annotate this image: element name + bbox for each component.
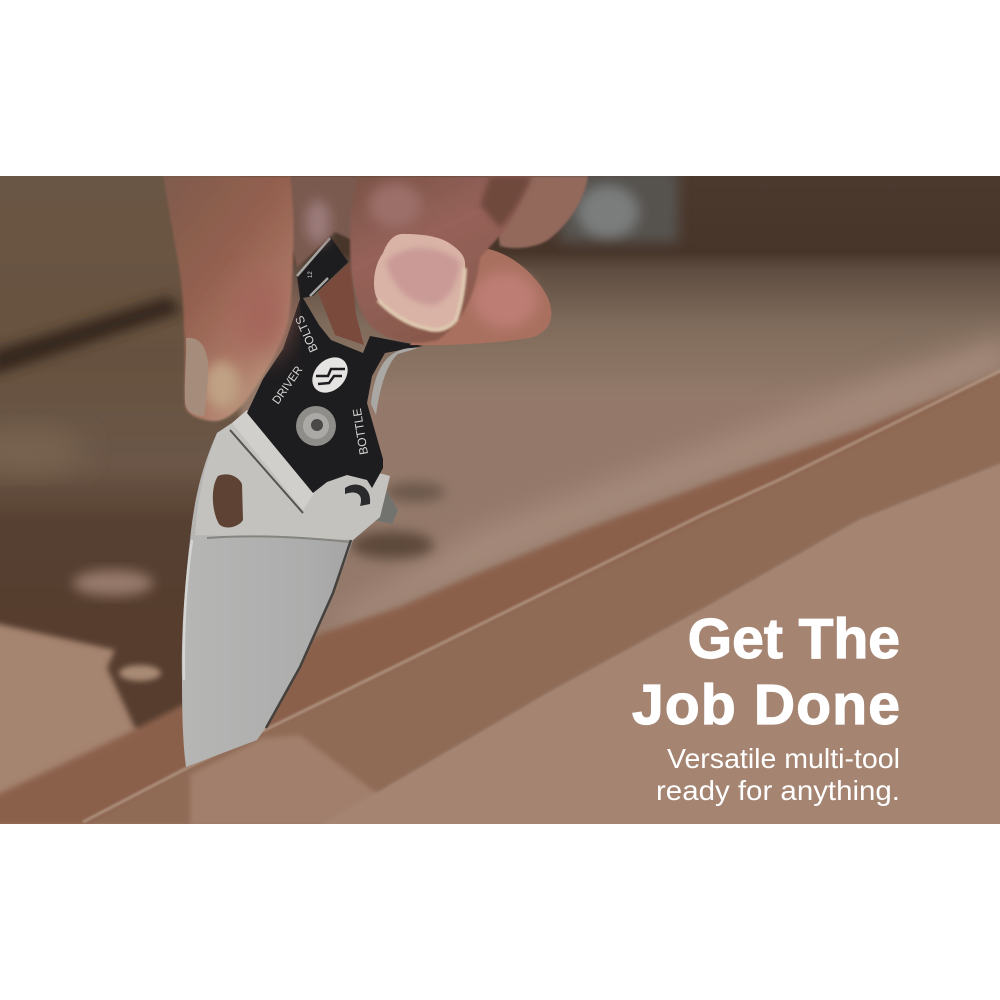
icon: black multi-tool handle: 12 [308, 271, 314, 278]
bar highlights [297, 238, 330, 276]
heading and caption: Job Done [632, 673, 900, 737]
tool logo [312, 357, 348, 393]
caption: Versatile multi-tool [667, 743, 900, 774]
web of skin behind tool [288, 176, 360, 268]
steel frame under the handle [232, 410, 315, 510]
lower-left cardboard [0, 624, 134, 793]
packing tape strip [0, 368, 1000, 826]
back fingers [490, 176, 588, 248]
lower cardboard flap [320, 460, 1000, 826]
thumb [350, 176, 530, 343]
shadowed wall and knife shadow at left [0, 170, 240, 772]
shadows of the knife [350, 482, 445, 559]
engraved labels: DRIVER [271, 364, 305, 407]
dark crease on the left wall [0, 296, 182, 376]
lighter patch on left wall [0, 431, 72, 470]
heading and caption [632, 607, 900, 806]
icon: black multi-tool handle: BOTTLE [350, 407, 371, 456]
icon: hand gripping the tool [163, 176, 588, 421]
icon: black multi-tool handle: BOLTS [292, 314, 321, 354]
light patches [73, 570, 153, 596]
handle body [247, 236, 423, 493]
screw [296, 406, 336, 446]
bottle opener notch [345, 485, 370, 506]
seam between the flaps [83, 366, 1000, 822]
panel: photo of knife cutting cardboard [0, 170, 1000, 830]
icon: black multi-tool handle [230, 236, 423, 513]
far finger tip under thumb [410, 247, 551, 345]
infographic canvas [0, 176, 1000, 824]
grey object in the background [560, 170, 678, 242]
thumbnail [374, 234, 465, 330]
heading: Get The [688, 607, 900, 671]
lighter cardboard above the tape [330, 335, 1000, 640]
index finger [163, 176, 294, 421]
blurred back wall [238, 176, 1000, 370]
cardboard surface [200, 400, 1000, 824]
crescent steel edge [371, 348, 418, 415]
icon: knife blade [182, 423, 398, 767]
heading and caption: ready for anything. [656, 775, 900, 806]
